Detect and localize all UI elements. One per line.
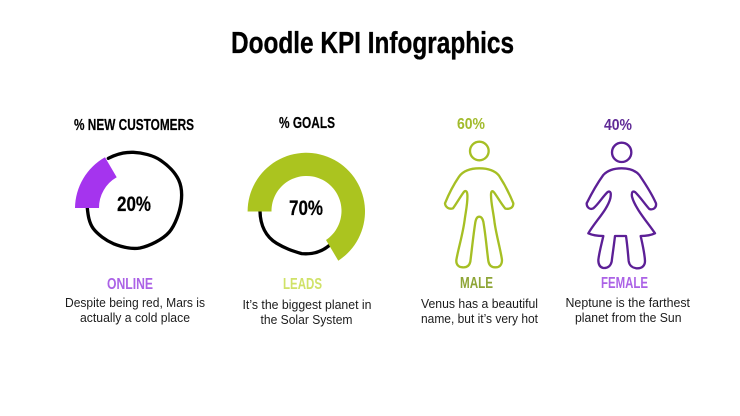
text: female description: Neptune is the farthest <box>566 295 690 310</box>
text: online description: actually a cold place <box>80 310 190 325</box>
panel: male <box>421 116 538 326</box>
heading: new customers: % NEW CUSTOMERS <box>74 117 194 134</box>
label: leads: LEADS <box>283 276 322 293</box>
text: female description: planet from the Sun <box>575 310 682 325</box>
panel: goals <box>242 115 372 327</box>
value: 60%: 60% <box>457 116 485 133</box>
donut chart: 20%: 20% <box>117 193 151 216</box>
title: Doodle KPI Infographics <box>231 25 514 60</box>
text: leads description: the Solar System <box>260 312 352 327</box>
panel: new customers <box>65 117 205 325</box>
text: male description: name, but it’s very hot <box>421 311 538 326</box>
value: 40%: 40% <box>604 117 632 134</box>
icon: male figure <box>445 142 513 267</box>
text: male description: Venus has a beautiful <box>421 296 538 311</box>
label: online: ONLINE <box>107 276 153 293</box>
donut chart: 20% <box>75 152 182 248</box>
text: leads description: It’s the biggest planet in <box>242 297 372 312</box>
donut chart: 70% <box>248 153 365 261</box>
label: male: MALE <box>460 275 493 292</box>
heading: goals: % GOALS <box>279 115 335 132</box>
panel: female <box>566 117 690 325</box>
label: female: FEMALE <box>601 275 648 292</box>
donut chart: 70%: 70% <box>289 197 323 220</box>
icon: female figure <box>587 143 656 268</box>
text: online description: Despite being red, Mars is <box>65 295 205 310</box>
